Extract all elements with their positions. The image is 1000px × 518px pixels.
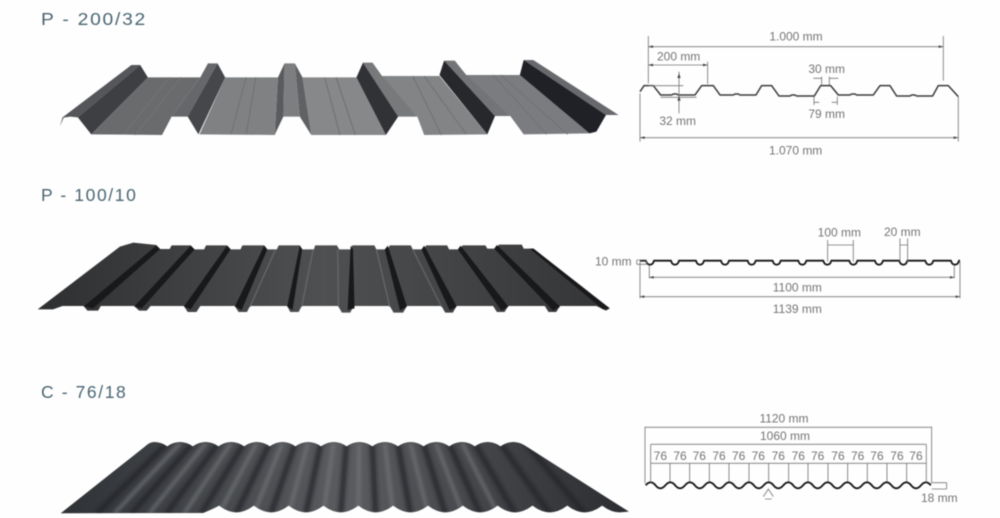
diagram: P-200/32 cross-section: 200 mm <box>657 49 700 63</box>
dimension lines <box>640 36 958 142</box>
diagram: C-76/18 cross-section: 76 <box>752 449 765 463</box>
diagram: P-100/10 cross-section: 20 mm <box>884 225 921 239</box>
dimension labels: 10 mm <box>595 254 632 268</box>
diagram: C-76/18 cross-section: 18 mm <box>921 491 958 505</box>
diagram: C-76/18 cross-section: 76 <box>693 449 706 463</box>
diagram: C-76/18 cross-section: 76 <box>772 449 785 463</box>
diagram: C-76/18 cross-section: 76 <box>870 449 884 463</box>
diagram: P-100/10 cross-section: 100 mm <box>818 225 861 239</box>
diagram: C-76/18 cross-section: 76 <box>851 449 865 463</box>
profile line <box>640 261 960 265</box>
dimension lines <box>645 427 947 499</box>
diagram: P-200/32 cross-section: 30 mm <box>808 62 845 76</box>
diagram: C-76/18 cross-section: 76 <box>909 449 923 463</box>
diagram: C-76/18 cross-section: 76 <box>673 449 687 463</box>
dimension lines <box>640 238 960 298</box>
diagram: C-76/18 cross-section: 76 <box>831 449 845 463</box>
diagram: C-76/18 cross-section: 76 <box>732 449 746 463</box>
diagram: C-76/18 cross-section: 76 <box>654 449 667 463</box>
panel: C-76/18 profile <box>41 382 958 517</box>
title: P - 100/10: P - 100/10 <box>41 185 137 205</box>
diagram: C-76/18 cross-section: 76 <box>890 449 904 463</box>
profile line <box>640 86 958 97</box>
panel: P-100/10 profile <box>38 185 960 316</box>
diagram: P-100/10 cross-section <box>595 225 960 316</box>
dimension labels: 1.000 mm <box>769 30 823 44</box>
diagram: P-200/32 cross-section <box>640 30 958 157</box>
panel: P-200/32 profile <box>41 9 958 157</box>
diagram: P-200/32 cross-section: 1.070 mm <box>769 143 822 157</box>
profile line <box>646 482 931 488</box>
diagram: P-200/32 cross-section: 32 mm <box>659 114 696 128</box>
photo: corrugated sheet C-76/18 <box>57 438 635 517</box>
diagram: C-76/18 cross-section: 1060 mm <box>760 429 810 443</box>
diagram: P-100/10 cross-section: 1139 mm <box>773 302 822 316</box>
photo: trapezoidal sheet P-100/10 <box>38 243 610 313</box>
diagram: C-76/18 cross-section <box>645 411 958 505</box>
diagram: C-76/18 cross-section: 76 <box>792 449 805 463</box>
photo: trapezoidal sheet P-200/32 <box>60 60 619 135</box>
diagram: C-76/18 cross-section: 76 <box>811 449 825 463</box>
diagram: P-200/32 cross-section: 79 mm <box>808 107 845 121</box>
title: C - 76/18: C - 76/18 <box>41 382 127 402</box>
diagram: P-100/10 cross-section: 1100 mm <box>773 280 822 294</box>
title: P - 200/32: P - 200/32 <box>41 9 147 29</box>
diagram: C-76/18 cross-section: 76 <box>712 449 726 463</box>
dimension labels: 1120 mm <box>759 411 809 425</box>
